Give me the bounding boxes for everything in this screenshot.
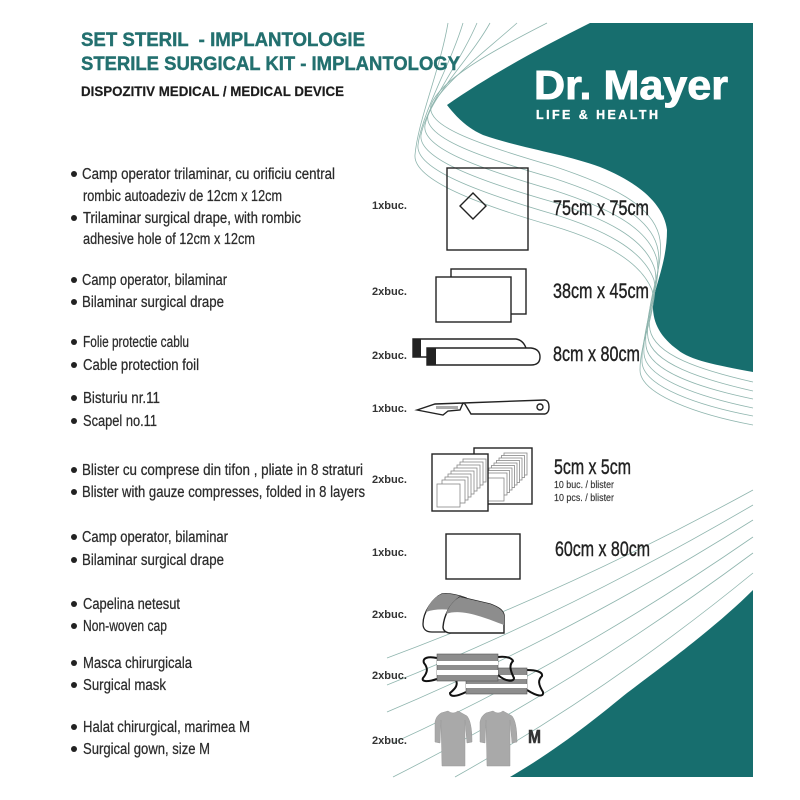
description bbox=[71, 272, 227, 311]
description: Scapel no.11 bbox=[83, 413, 157, 430]
size M: M bbox=[528, 727, 541, 747]
size: 8cm x 80cm bbox=[553, 343, 640, 366]
lower teal corner shape bbox=[510, 590, 753, 777]
title: STERILE SURGICAL KIT - IMPLANTOLOGY bbox=[81, 53, 460, 75]
row: non-woven cap bbox=[71, 594, 504, 635]
title bbox=[81, 29, 460, 75]
logo: Dr. Mayer: LIFE & HEALTH bbox=[536, 108, 658, 122]
description: Bilaminar surgical drape bbox=[82, 294, 224, 311]
size and pieces per blister: 10 buc. / blister bbox=[554, 479, 614, 491]
icon: two gowns bbox=[435, 711, 517, 766]
row: surgical gown bbox=[71, 711, 541, 766]
icon: single drape bbox=[446, 534, 520, 579]
size: 60cm x 80cm bbox=[555, 538, 650, 561]
description: adhesive hole of 12cm x 12cm bbox=[83, 231, 255, 248]
quantity: 1xbuc. bbox=[372, 403, 407, 415]
quantity: 1xbuc. bbox=[372, 200, 407, 212]
description: Surgical gown, size M bbox=[83, 741, 210, 758]
quantity: 1xbuc. bbox=[372, 547, 407, 559]
quantity: 2xbuc. bbox=[372, 474, 407, 486]
row: surgical mask bbox=[71, 654, 543, 696]
logo: Dr. Mayer: Dr. Mayer bbox=[534, 62, 728, 108]
row: gauze blister bbox=[71, 448, 631, 511]
description: Blister cu comprese din tifon , pliate in 8 straturi bbox=[82, 462, 363, 479]
size and pieces per blister bbox=[554, 456, 631, 504]
icon: two caps bbox=[423, 594, 504, 633]
icon: two surgical masks bbox=[423, 654, 543, 696]
description bbox=[71, 462, 365, 501]
icon: two gauze blisters bbox=[432, 448, 532, 511]
description: Bilaminar surgical drape bbox=[82, 552, 224, 569]
icon: rolled cable foils bbox=[413, 339, 540, 365]
description: Halat chirurgical, marimea M bbox=[83, 719, 250, 736]
description bbox=[71, 596, 181, 635]
description bbox=[71, 166, 335, 248]
row: bilaminar drape 38x45 bbox=[71, 269, 649, 322]
icon: square drape with diamond hole bbox=[447, 168, 528, 250]
lower wave lines bbox=[387, 490, 753, 777]
description: Surgical mask bbox=[83, 677, 166, 694]
description: Cable protection foil bbox=[83, 357, 199, 374]
description bbox=[71, 529, 228, 569]
size: 38cm x 45cm bbox=[553, 280, 649, 303]
quantity: 2xbuc. bbox=[372, 286, 407, 298]
description: Masca chirurgicala bbox=[83, 655, 192, 672]
row: scalpel bbox=[71, 390, 549, 430]
description: Camp operator, bilaminar bbox=[82, 272, 227, 289]
size and pieces per blister: 10 pcs. / blister bbox=[554, 492, 614, 504]
description: Bisturiu nr.11 bbox=[83, 390, 160, 407]
size: 75cm x 75cm bbox=[553, 197, 649, 220]
description: Camp operator, bilaminar bbox=[82, 529, 228, 546]
quantity: 2xbuc. bbox=[372, 609, 407, 621]
size and pieces per blister: 5cm x 5cm bbox=[554, 456, 631, 479]
description bbox=[71, 719, 250, 758]
description: rombic autoadeziv de 12cm x 12cm bbox=[83, 188, 282, 205]
description bbox=[71, 655, 192, 694]
description: Capelina netesut bbox=[83, 596, 181, 613]
row: bilaminar drape 60x80 bbox=[71, 529, 650, 579]
description: Camp operator trilaminar, cu orificiu central bbox=[82, 166, 335, 183]
row: trilaminar drape bbox=[71, 166, 649, 250]
upper teal brand shape bbox=[447, 23, 753, 372]
title: SET STERIL - IMPLANTOLOGIE bbox=[81, 29, 365, 51]
quantity: 2xbuc. bbox=[372, 670, 407, 682]
description bbox=[71, 390, 160, 430]
icon: two overlapping drapes bbox=[436, 269, 526, 322]
upper wave lines bbox=[415, 23, 753, 425]
description: Folie protectie cablu bbox=[83, 334, 189, 351]
description: Blister with gauze compresses, folded in 8 layers bbox=[82, 484, 365, 501]
subtitle: DISPOZITIV MEDICAL / MEDICAL DEVICE bbox=[81, 84, 344, 99]
quantity: 2xbuc. bbox=[372, 735, 407, 747]
quantity: 2xbuc. bbox=[372, 350, 407, 362]
icon: scalpel bbox=[417, 400, 549, 415]
description: Non-woven cap bbox=[83, 618, 167, 635]
row: cable protection foil bbox=[71, 334, 640, 374]
description: Trilaminar surgical drape, with rombic bbox=[83, 210, 301, 227]
description bbox=[71, 334, 199, 374]
